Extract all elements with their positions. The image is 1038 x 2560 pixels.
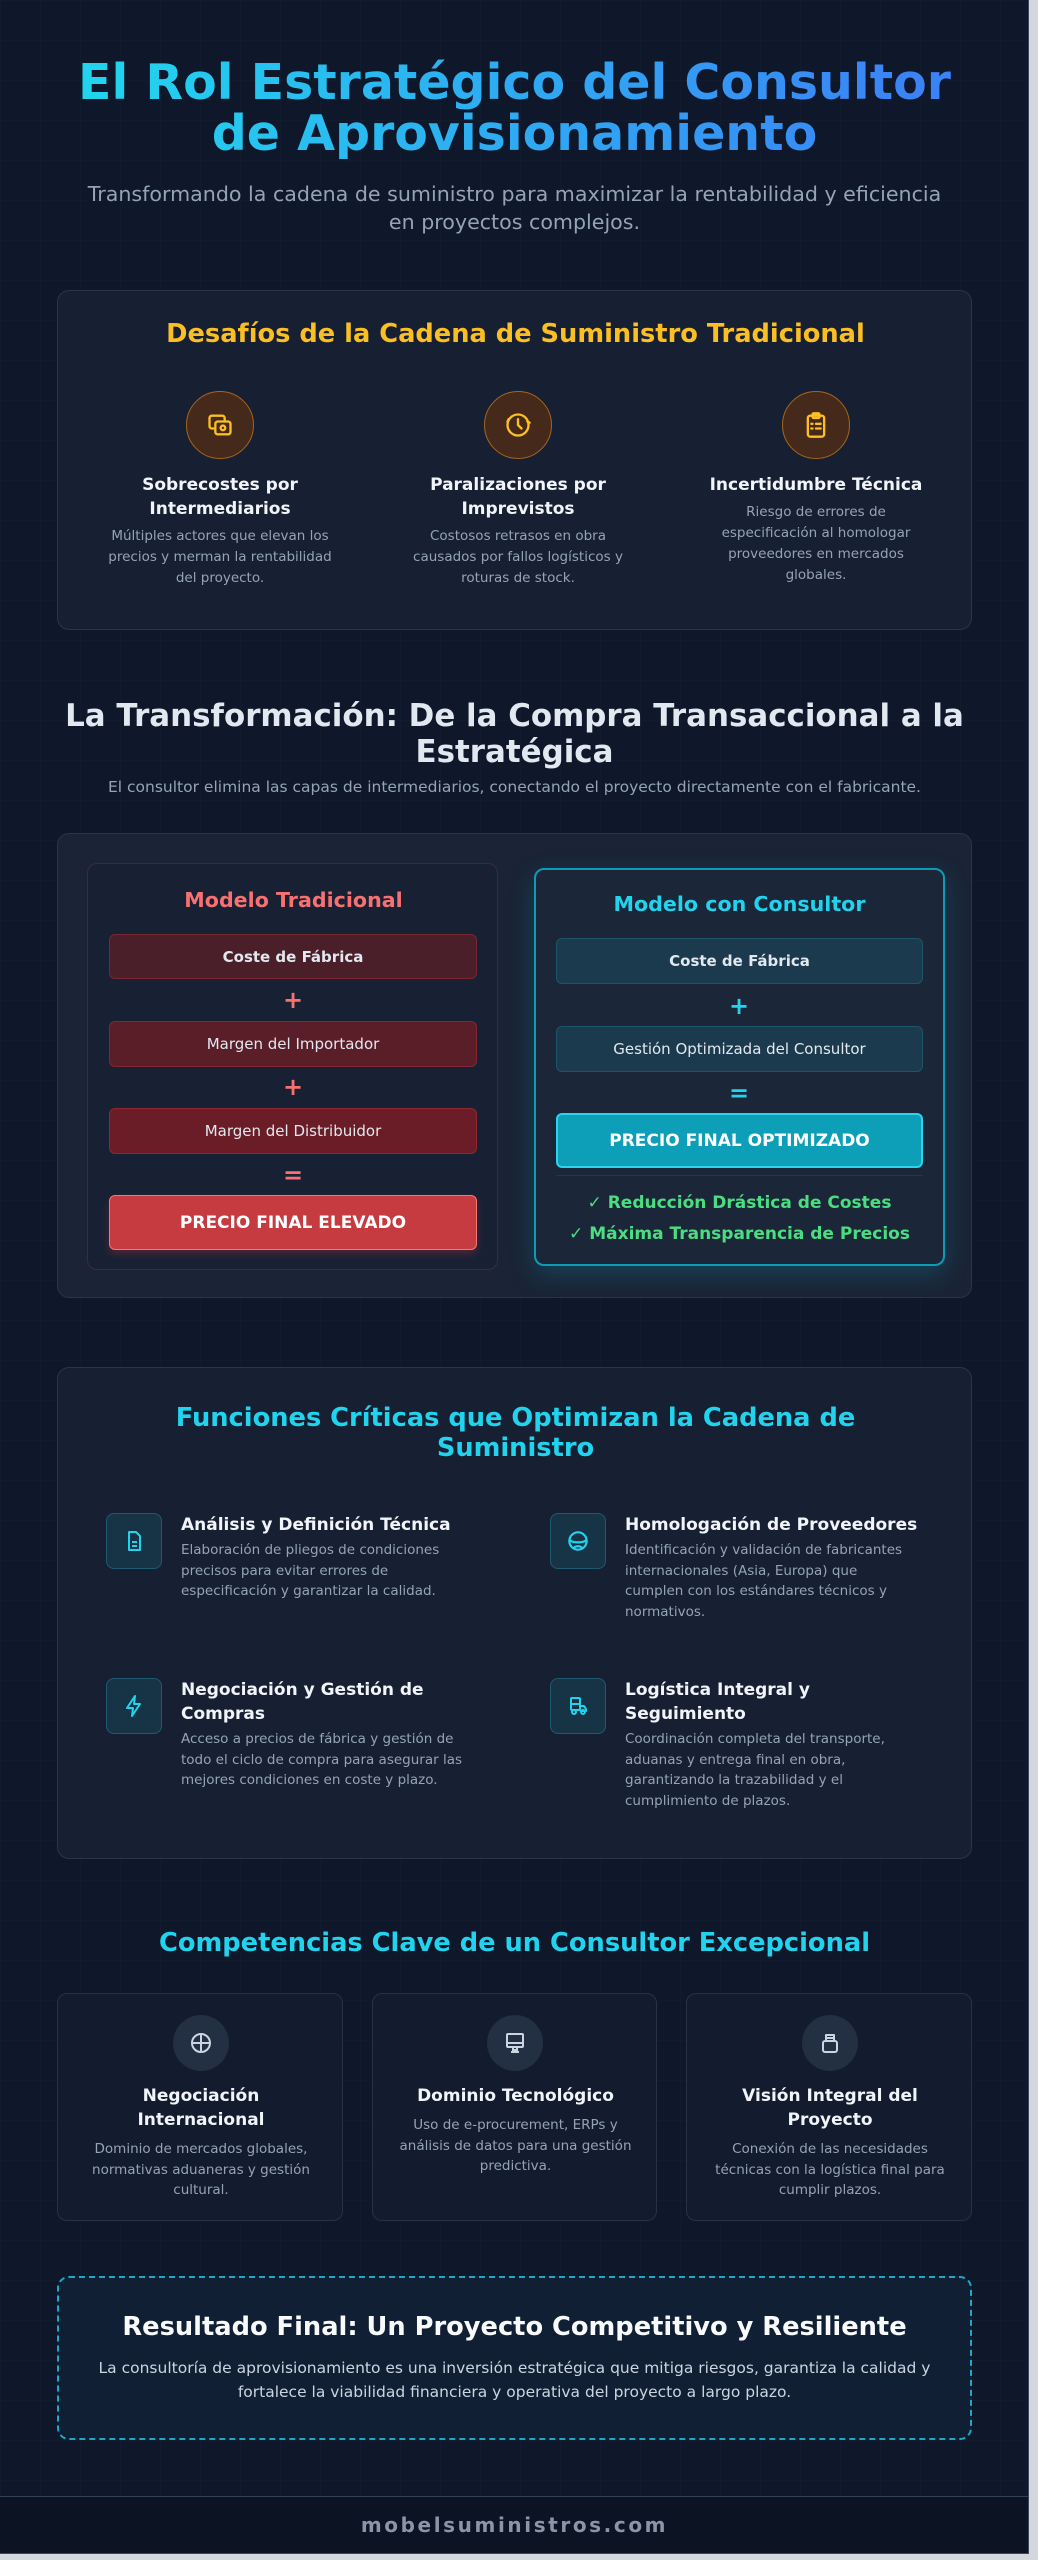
footer brand: mobelsuministros.com	[361, 2513, 668, 2537]
text: result	[99, 2359, 930, 2401]
icon: clipboard	[782, 391, 850, 459]
box: optimized management	[556, 1026, 923, 1072]
equals: =	[283, 1161, 303, 1189]
panel: model comparison	[57, 833, 972, 1298]
card: negotiation: cultural.	[173, 2182, 229, 2198]
icon: clock	[484, 391, 552, 459]
column: traditional model	[87, 863, 498, 1270]
card: technology	[372, 1993, 657, 2221]
card: technology: Dominio Tecnológico	[417, 2086, 614, 2106]
challenge 1: Sobrecostes por	[142, 475, 298, 495]
function 3: Compras	[181, 1704, 265, 1724]
plus: +	[729, 992, 749, 1020]
card: technology: Uso de e-procurement, ERPs y	[413, 2117, 618, 2133]
function 3: Acceso a precios de fábrica y gestión de	[181, 1731, 453, 1747]
challenge 3: proveedores en mercados	[728, 546, 904, 562]
function 4: cumplimiento de plazos.	[625, 1793, 790, 1809]
icon: globe	[550, 1513, 606, 1569]
heading: traditional: Modelo Tradicional	[184, 888, 403, 912]
card: technology: predictiva.	[480, 2158, 551, 2174]
card: technology: análisis de datos para una gestión	[400, 2138, 632, 2154]
function 4	[550, 1678, 885, 1809]
heading: transformation	[65, 698, 964, 770]
plus: +	[283, 1073, 303, 1101]
function 3: Negociación y Gestión de	[181, 1680, 424, 1700]
box: high final price	[109, 1195, 477, 1250]
subheading: transformation: El consultor elimina las capas de intermediarios, conectando el proyecto directamente con el fabricante.	[108, 778, 921, 796]
benefits list: ✓ Reducción Drástica de Costes	[588, 1193, 891, 1213]
challenge 2: causados por fallos logísticos y	[413, 549, 623, 565]
icon: money	[186, 391, 254, 459]
function 3	[106, 1678, 462, 1788]
function 3: mejores condiciones en coste y plazo.	[181, 1772, 438, 1788]
subtitle: en proyectos complejos.	[389, 210, 640, 234]
challenge 3: globales.	[786, 567, 846, 583]
box: factory cost: Coste de Fábrica	[223, 948, 363, 966]
challenge 1: Múltiples actores que elevan los	[111, 528, 329, 544]
icon: lightning	[106, 1678, 162, 1734]
card: integral vision: cumplir plazos.	[779, 2182, 881, 2198]
card: negotiation	[57, 1993, 343, 2221]
function 4: Seguimiento	[625, 1704, 746, 1724]
heading: consultant: Modelo con Consultor	[614, 892, 865, 916]
challenge 1: precios y merman la rentabilidad	[108, 549, 332, 565]
heading: functions	[176, 1403, 855, 1463]
challenge 2	[413, 475, 623, 586]
heading: competencies: Competencias Clave de un Consultor Excepcional	[159, 1928, 870, 1958]
card: integral vision: Visión Integral del	[742, 2086, 918, 2106]
benefits list: ✓ Máxima Transparencia de Precios	[569, 1224, 910, 1244]
function 4: garantizando la trazabilidad y el	[625, 1772, 843, 1788]
function 1: precisos para evitar errores de	[181, 1563, 388, 1579]
icon: truck	[550, 1678, 606, 1734]
heading: functions: Funciones Críticas que Optimizan la Cadena de	[176, 1403, 855, 1433]
title	[0, 57, 1029, 159]
card: integral vision: técnicas con la logística final para	[715, 2162, 945, 2178]
column: consultant model	[534, 868, 945, 1266]
heading: challenges: Desafíos de la Cadena de Suministro Tradicional	[166, 319, 865, 349]
card: integral vision: Conexión de las necesidades	[732, 2141, 928, 2157]
box: optimized final price: PRECIO FINAL OPTIMIZADO	[609, 1130, 870, 1150]
challenge 1	[108, 475, 332, 586]
box: optimized final price	[556, 1113, 923, 1168]
icon: package	[802, 2015, 858, 2071]
subtitle: Transformando la cadena de suministro para maximizar la rentabilidad y eficiencia	[88, 182, 941, 206]
title: de Aprovisionamiento	[212, 105, 817, 162]
callout: final result	[57, 2276, 972, 2440]
function 2: normativos.	[625, 1604, 705, 1620]
card: negotiation: normativas aduaneras y gestión	[92, 2162, 310, 2178]
function 1: especificación y garantizar la calidad.	[181, 1583, 436, 1599]
heading: result: Resultado Final: Un Proyecto Competitivo y Resiliente	[122, 2312, 907, 2342]
challenge 3	[710, 475, 922, 583]
text: result: La consultoría de aprovisionamiento es una inversión estratégica que mitiga riesgos, garantiza la calidad y	[99, 2359, 930, 2377]
card: negotiation: Negociación	[143, 2086, 259, 2106]
card: integral vision	[686, 1993, 972, 2221]
heading: transformation: Estratégica	[416, 734, 613, 770]
function 1: Análisis y Definición Técnica	[181, 1515, 451, 1535]
challenge 2: Paralizaciones por	[430, 475, 606, 495]
function 3: todo el ciclo de compra para asegurar las	[181, 1752, 462, 1768]
box: factory cost: Coste de Fábrica	[669, 952, 810, 970]
plus: +	[283, 986, 303, 1014]
challenge 3: Riesgo de errores de	[746, 504, 886, 520]
challenge 1: del proyecto.	[176, 570, 264, 586]
challenge 2: Imprevistos	[461, 499, 575, 519]
text: result: fortalece la viabilidad financiera y operativa del proyecto a largo plazo.	[238, 2383, 791, 2401]
function 4: Logística Integral y	[625, 1680, 810, 1700]
icon: document	[106, 1513, 162, 1569]
footer	[0, 2496, 1029, 2554]
function 4: Coordinación completa del transporte,	[625, 1731, 885, 1747]
function 2	[550, 1513, 917, 1620]
challenge 1: Intermediarios	[149, 499, 291, 519]
function 4: aduanas y entrega final en obra,	[625, 1752, 845, 1768]
function 1	[106, 1513, 451, 1599]
box: distributor margin: Margen del Distribuidor	[205, 1122, 381, 1140]
challenge 3: especificación al homologar	[722, 525, 910, 541]
icon: monitor	[487, 2015, 543, 2071]
function 2: Identificación y validación de fabricantes	[625, 1542, 902, 1558]
heading: functions: Suministro	[437, 1433, 594, 1463]
function 2: cumplen con los estándares técnicos y	[625, 1583, 887, 1599]
box: factory cost	[109, 934, 477, 979]
icon: globe	[173, 2015, 229, 2071]
title: El Rol Estratégico del Consultor	[78, 54, 951, 111]
panel: challenges	[57, 290, 972, 630]
subtitle	[88, 182, 941, 234]
card: negotiation: Internacional	[137, 2110, 265, 2130]
box: distributor margin	[109, 1108, 477, 1154]
challenge 3: Incertidumbre Técnica	[710, 475, 922, 495]
challenge 2: roturas de stock.	[461, 570, 575, 586]
panel: critical functions	[57, 1367, 972, 1859]
card: integral vision: Proyecto	[787, 2110, 873, 2130]
box: optimized management: Gestión Optimizada del Consultor	[613, 1040, 866, 1058]
box: importer margin	[109, 1021, 477, 1067]
benefits list	[556, 1175, 923, 1250]
equals: =	[729, 1079, 749, 1107]
function 2: internacionales (Asia, Europa) que	[625, 1563, 857, 1579]
box: importer margin: Margen del Importador	[207, 1035, 379, 1053]
function 1: Elaboración de pliegos de condiciones	[181, 1542, 439, 1558]
card: negotiation: Dominio de mercados globales,	[95, 2141, 307, 2157]
box: high final price: PRECIO FINAL ELEVADO	[180, 1212, 406, 1232]
function 2: Homologación de Proveedores	[625, 1515, 917, 1535]
box: factory cost	[556, 938, 923, 984]
challenge 2: Costosos retrasos en obra	[430, 528, 606, 544]
heading: transformation: La Transformación: De la Compra Transaccional a la	[65, 698, 964, 734]
